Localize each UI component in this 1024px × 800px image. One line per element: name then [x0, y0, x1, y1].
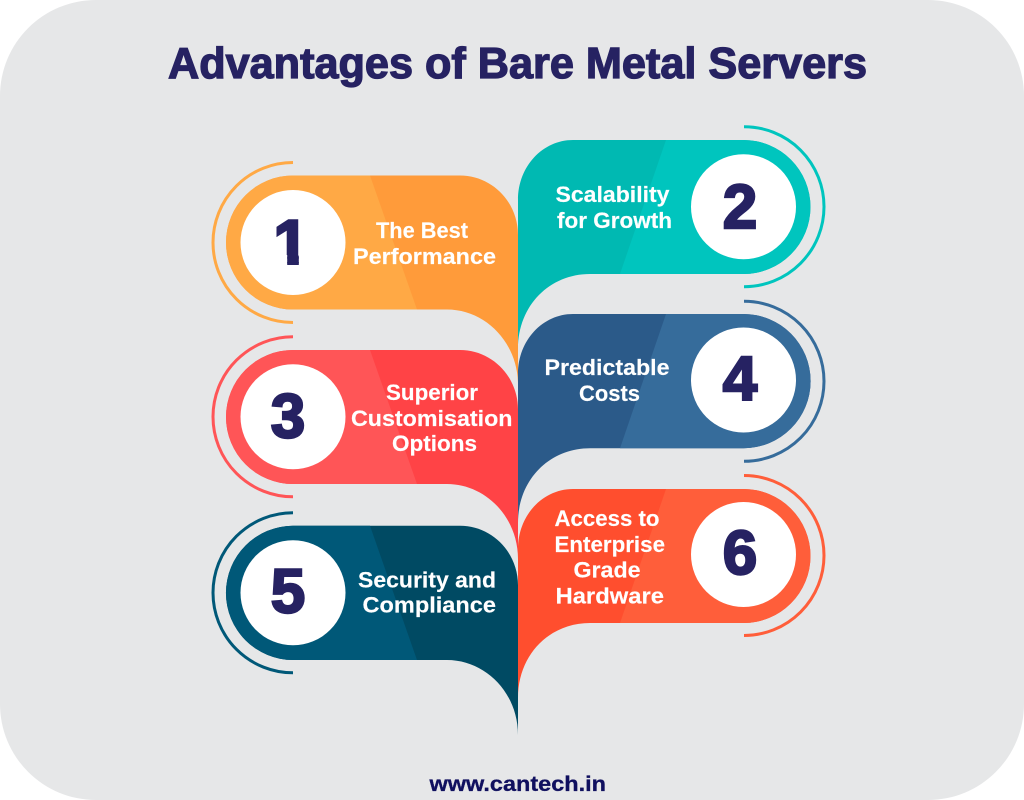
- number badge 2: 2: [723, 173, 757, 242]
- ribbon shape 6: [518, 489, 810, 698]
- label 2: for Growth: [557, 208, 672, 233]
- label 2: [556, 182, 672, 233]
- number badge 6: 6: [723, 519, 757, 588]
- label 3: Superior: [386, 380, 478, 405]
- panel: 4 Predictable Costs: [518, 301, 824, 523]
- label 1: The Best: [376, 218, 469, 243]
- ribbon shape 3: [226, 350, 518, 559]
- arc 2: [744, 127, 824, 287]
- panel: 6 Access to Enterprise Grade Hardware: [518, 476, 824, 698]
- arc 6: [744, 476, 824, 636]
- label 5: [358, 568, 496, 618]
- label 6: Enterprise: [554, 532, 665, 557]
- ribbon shape 5: [226, 526, 518, 735]
- label 2: Scalability: [556, 182, 670, 207]
- title: Advantages of Bare Metal Servers: [168, 39, 867, 88]
- panel: 1 The Best Performance: [213, 162, 518, 385]
- website url: www.cantech.in: [428, 773, 606, 796]
- label 4: [544, 355, 670, 406]
- ribbon shape 2: [518, 140, 810, 349]
- number badge 3: [240, 364, 346, 469]
- panel: 5 Security and Compliance: [213, 513, 518, 735]
- label 6: [554, 506, 665, 608]
- number badge 5: [240, 540, 346, 645]
- panel: 3 Superior Customisation Options: [213, 337, 518, 559]
- panel: 2 Scalability for Growth: [518, 127, 824, 349]
- arc 3: [213, 337, 293, 497]
- label 3: Options: [392, 431, 477, 456]
- number badge 1: 1: [274, 208, 308, 278]
- number badge 2: [691, 154, 796, 259]
- arc 1: [213, 162, 293, 322]
- label 1: Performance: [353, 244, 496, 269]
- label 4: Predictable: [544, 355, 670, 380]
- number badge 4: [691, 328, 796, 432]
- label 6: Grade: [574, 558, 640, 582]
- label 6: Access to: [554, 506, 660, 531]
- number badge 1: [240, 190, 346, 295]
- number badge 5: 5: [271, 558, 305, 626]
- number badge 3: 3: [271, 382, 305, 452]
- label 5: Security and: [358, 568, 496, 592]
- label 6: Hardware: [556, 584, 664, 608]
- label 4: Costs: [579, 381, 640, 406]
- number badge 4: 4: [723, 344, 758, 414]
- label 3: Customisation: [351, 406, 512, 431]
- number badge 6: [691, 502, 796, 607]
- label 3: [351, 380, 512, 456]
- label 5: Compliance: [362, 592, 496, 618]
- arc 4: [744, 301, 824, 461]
- arc 5: [213, 513, 293, 673]
- ribbon shape 4: [518, 314, 811, 523]
- ribbon shape 1: [226, 176, 518, 385]
- label 1: [353, 218, 496, 269]
